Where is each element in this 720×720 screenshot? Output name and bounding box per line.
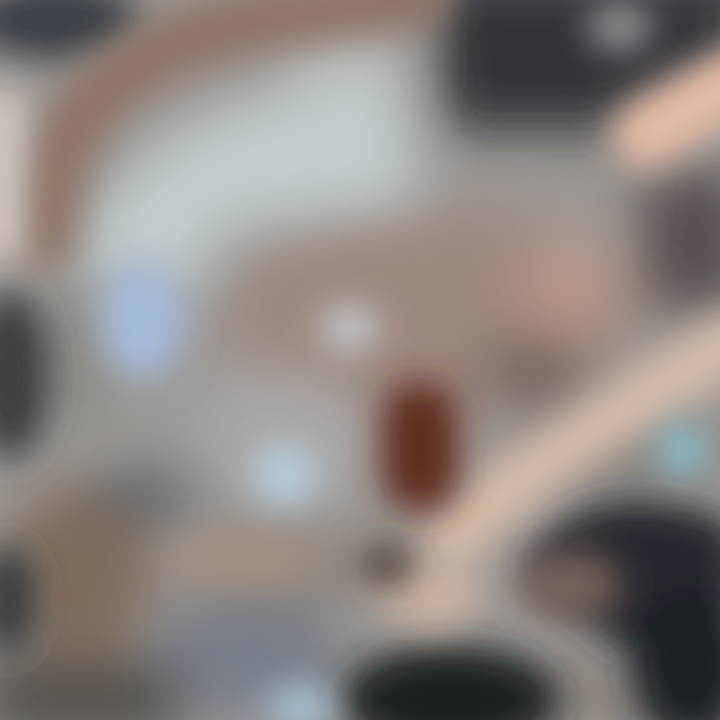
brown bottle [382, 382, 458, 512]
arm top left [42, 0, 420, 235]
dark gap near hand [362, 545, 414, 585]
lower right arm [450, 340, 720, 540]
right hand [645, 80, 720, 135]
left light strip [0, 90, 22, 260]
brown patch in dark area [518, 549, 622, 621]
central pale spot [320, 306, 380, 350]
light spot top right [588, 5, 652, 49]
hand near bottom [170, 538, 482, 628]
light blue spots [255, 447, 334, 720]
cyan spot [658, 424, 706, 476]
blue circle [100, 264, 184, 380]
